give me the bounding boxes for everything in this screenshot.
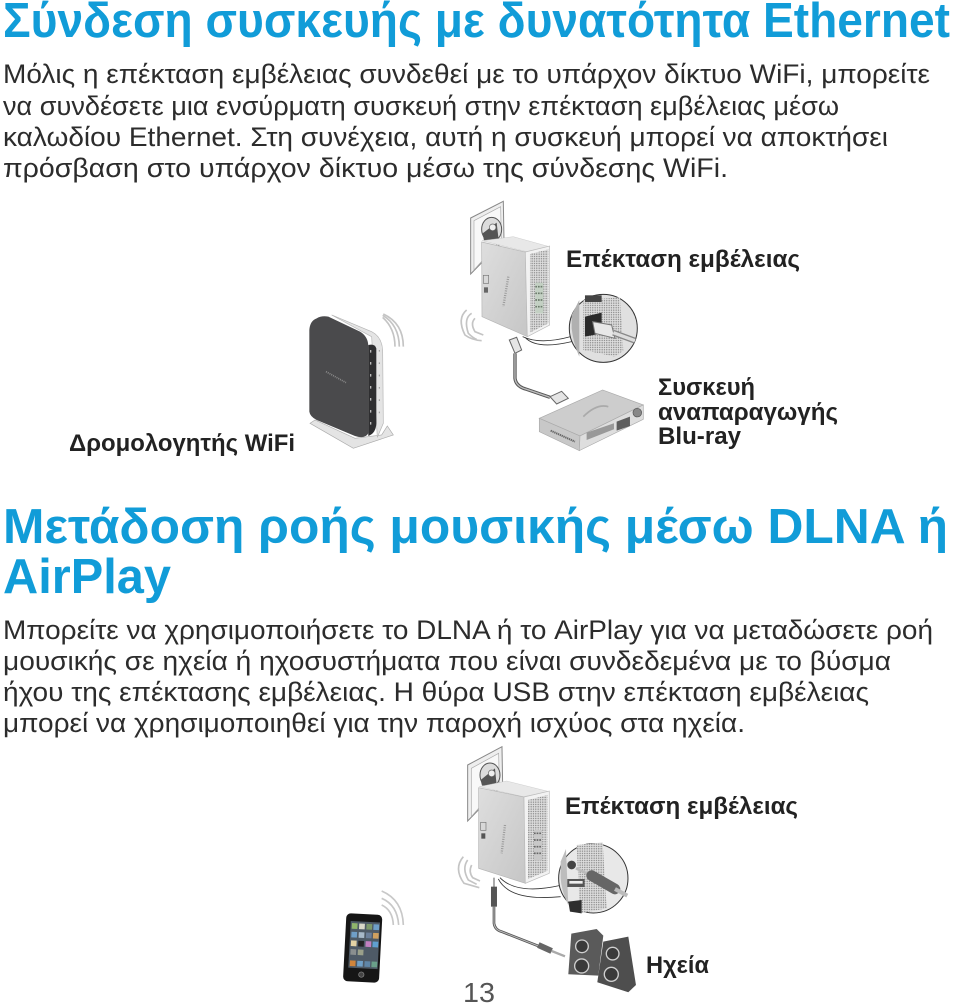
streaming text block: Μπορείτε να χρησιμοποιήσετε το DLNA ή το AirPlay για να μεταδώσετε ροή [3,615,933,645]
streaming text block [3,615,933,738]
icon: range extender [461,237,550,341]
icon: ethernet cable [509,337,568,404]
heading: music streaming: AirPlay [3,550,171,604]
label: WiFi router: Δρομολογητής WiFi [69,430,295,457]
icon: callout port detail [523,294,637,362]
icon: phone wifi waves [382,891,403,925]
diagram: ethernet connection [309,201,643,451]
icon: wall socket [468,747,503,821]
icon: extender wifi waves [458,857,480,888]
intro text block: να συνδέσετε μια ενσύρματη συσκευή στην επέκταση εμβέλειας μέσω [3,91,839,121]
intro text block [3,59,930,183]
icon: WiFi router [309,314,403,448]
streaming text block: μουσικής σε ηχεία ή ηχοσυστήματα που είναι συνδεδεμένα με το βύσμα [3,646,891,676]
icon: range extender [458,781,549,888]
diagram: music streaming [343,747,636,992]
label: speakers: Ηχεία [646,952,709,979]
label: range extender: Επέκταση εμβέλειας [565,793,798,820]
label: Blu-ray player: αναπαραγωγής [658,399,838,426]
icon: audio cable [494,878,565,956]
label: Blu-ray player: Συσκευή [658,374,755,401]
intro text block: πρόσβαση στο υπάρχον δίκτυο μέσω της σύνδεσης WiFi. [3,153,728,183]
icon: callout audio port detail [498,842,628,913]
icon: speakers [568,929,636,992]
streaming text block: μπορεί να χρησιμοποιηθεί για την παροχή ισχύος στα ηχεία. [3,708,745,738]
streaming text block: ήχου της επέκτασης εμβέλειας. Η θύρα USB στην επέκταση εμβέλειας [3,677,869,707]
icon: router wifi waves [383,314,403,347]
icon: smartphone [343,913,382,983]
heading: music streaming: Μετάδοση ροής μουσικής μέσω DLNA ή [3,500,948,554]
icon: Blu-ray player [539,390,643,451]
label: Blu-ray player [658,374,838,450]
heading: music streaming [3,500,948,604]
intro text block: Μόλις η επέκταση εμβέλειας συνδεθεί με το υπάρχον δίκτυο WiFi, μπορείτε [3,59,930,89]
icon: wall socket [471,201,504,274]
label: range extender: Επέκταση εμβέλειας [566,246,800,273]
intro text block: καλωδίου Ethernet. Στη συνέχεια, αυτή η συσκευή μπορεί να αποκτήσει [3,122,888,152]
label: Blu-ray player: Blu-ray [658,423,742,450]
icon: extender wifi waves [461,310,483,341]
